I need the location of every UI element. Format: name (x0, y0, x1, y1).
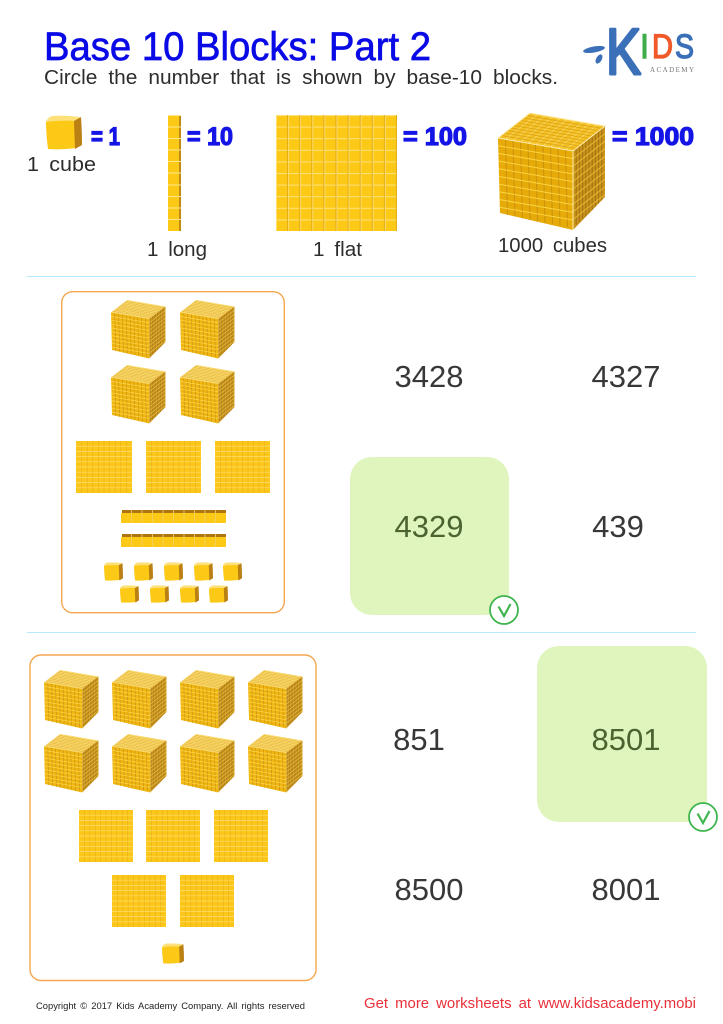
logo: Kids Academy (583, 15, 694, 88)
option 3428: 3428 (395, 359, 463, 394)
option 4327: 4327 (592, 359, 660, 394)
website link text: Get more worksheets at www.kidsacademy.mobi (364, 995, 696, 1012)
title: Base 10 Blocks: Part 2 (44, 25, 431, 69)
legend: 1000 cubes: 1000 cubes (498, 235, 607, 257)
option 8501: 8501 (592, 722, 660, 757)
logo: Kids Academy: I (640, 28, 648, 66)
copyright: Copyright © 2017 Kids Academy Company. All rights reserved (36, 1001, 305, 1012)
logo: Kids Academy: K (606, 15, 641, 88)
legend: 1 cube (27, 116, 120, 176)
answer highlight: 8501 (537, 646, 707, 822)
legend: 1000 cubes: = 1000 (612, 123, 694, 151)
option 8500: 8500 (395, 872, 463, 907)
logo: Kids Academy: ACADEMY (650, 66, 694, 74)
logo: Kids Academy: D (652, 28, 673, 66)
legend: 1 cube: = 1 (91, 123, 120, 151)
option 8001: 8001 (592, 872, 660, 907)
answer highlight: 4329 (350, 457, 509, 615)
legend: 1 long (147, 115, 233, 261)
legend: 1000 cubes (498, 113, 694, 257)
option 851: 851 (393, 722, 445, 757)
legend: 1 flat: = 100 (403, 123, 467, 151)
panel: question 1 blocks (62, 292, 284, 613)
logo: Kids Academy: S (675, 28, 694, 66)
panel: question 2 blocks (30, 655, 316, 980)
legend: 1 long: = 10 (187, 123, 233, 151)
option 439: 439 (592, 509, 644, 544)
instruction text: Circle the number that is shown by base-10 blocks. (44, 67, 558, 89)
legend: 1 flat: 1 flat (313, 239, 362, 261)
legend: 1 cube: 1 cube (27, 154, 96, 176)
icon: check mark 2 (689, 803, 717, 831)
icon: check mark 1 (490, 596, 518, 624)
legend: 1 flat (276, 115, 467, 261)
option 4329: 4329 (395, 509, 463, 544)
legend: 1 long: 1 long (147, 239, 207, 261)
